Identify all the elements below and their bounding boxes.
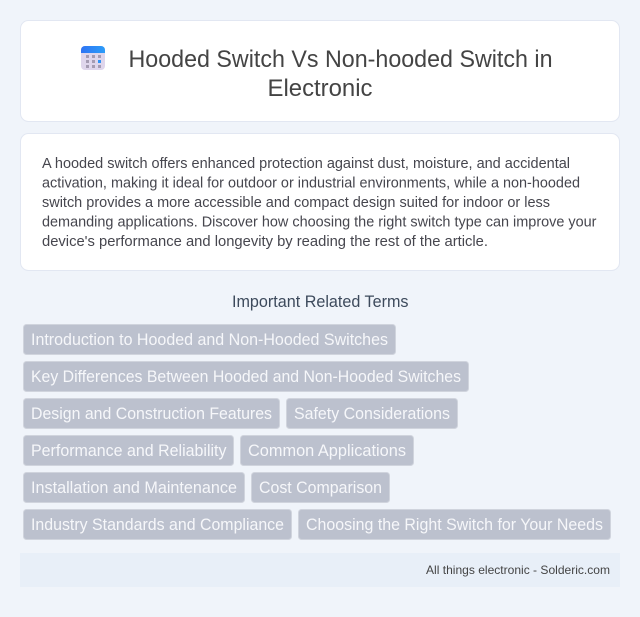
tag: standards	[24, 510, 292, 540]
tag: key differences	[24, 362, 468, 392]
tag: introduction: Introduction to Hooded and Non-Hooded Switches	[31, 330, 388, 349]
title: Electronic	[268, 75, 372, 102]
tag: performance: Performance and Reliability	[31, 441, 227, 460]
tag: applications	[240, 436, 414, 466]
heading: important related terms: Important Related Terms	[232, 293, 408, 311]
tag: cost	[252, 472, 390, 502]
title	[128, 46, 552, 102]
description text: activation, making it ideal for outdoor or industrial environments, while a non-hooded	[42, 176, 580, 192]
tag list	[24, 324, 610, 540]
description text: demanding applications. Discover how choosing the right switch type can improve your	[42, 214, 597, 230]
panel: description card	[20, 134, 620, 270]
footer: All things electronic - Solderic.com	[426, 563, 610, 577]
tag: installation: Installation and Maintenance	[31, 478, 237, 497]
tag: introduction	[24, 324, 396, 354]
tag: choosing: Choosing the Right Switch for Your Needs	[306, 515, 603, 534]
tag: design	[24, 398, 280, 428]
tag: design: Design and Construction Features	[31, 404, 272, 423]
tag: safety: Safety Considerations	[294, 404, 450, 423]
description text: switch provides a more accessible and compact design suited for indoor or less	[42, 195, 550, 211]
tag: cost: Cost Comparison	[259, 478, 382, 497]
description text	[42, 156, 597, 250]
footer	[20, 553, 620, 587]
title: Hooded Switch Vs Non-hooded Switch in	[128, 46, 552, 73]
tag: standards: Industry Standards and Compliance	[31, 515, 284, 534]
tag: performance	[24, 436, 234, 466]
tag: installation	[24, 472, 244, 502]
description text: A hooded switch offers enhanced protection against dust, moisture, and accidental	[42, 156, 570, 172]
icon: calendar	[81, 46, 105, 70]
tag: applications: Common Applications	[248, 441, 406, 460]
tag: key differences: Key Differences Between Hooded and Non-Hooded Switches	[31, 367, 461, 386]
panel: title card	[20, 20, 620, 122]
tag: safety	[286, 398, 458, 428]
tag: choosing	[298, 510, 610, 540]
description text: device's performance and longevity by reading the rest of the article.	[42, 234, 488, 250]
